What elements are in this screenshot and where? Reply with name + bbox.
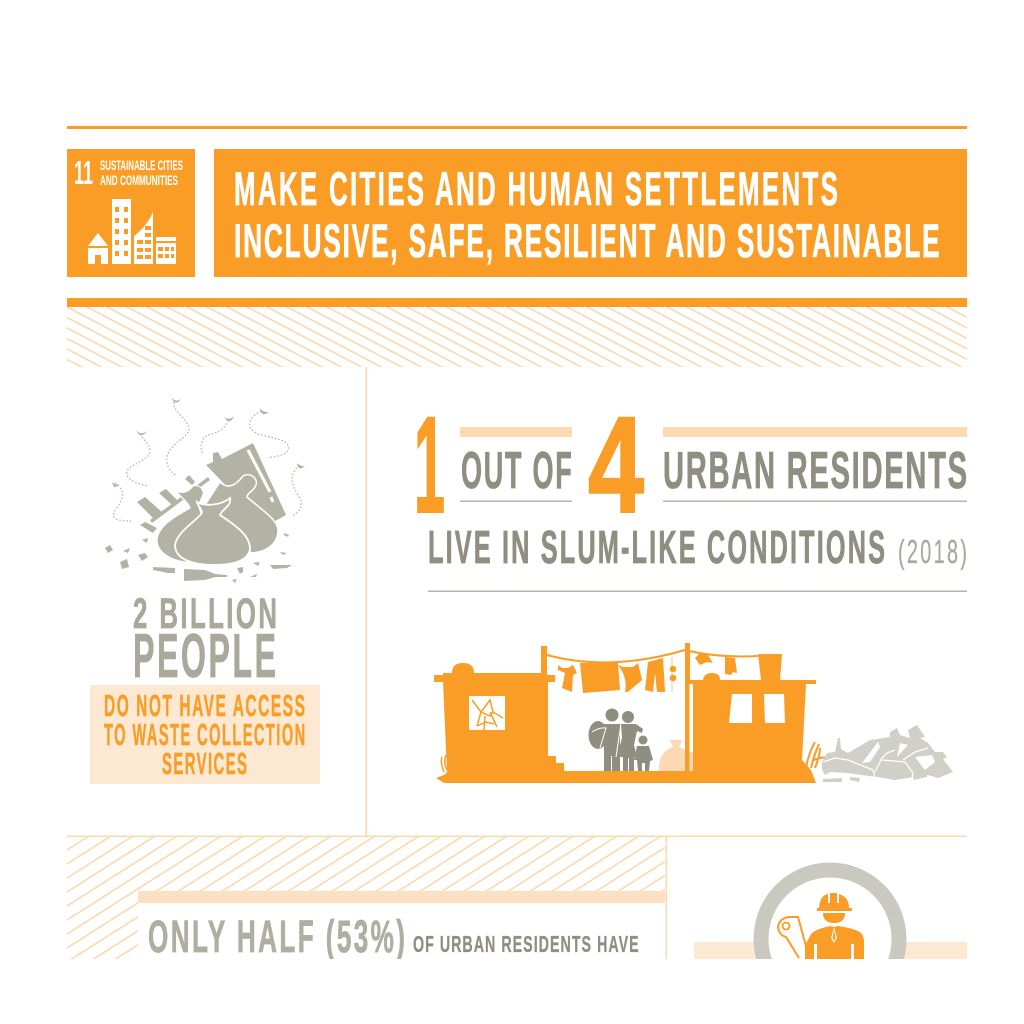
slum illustration bbox=[434, 643, 953, 783]
rubbish pile bbox=[822, 725, 953, 782]
title banner bbox=[214, 149, 967, 277]
stat: 2 billion people: PEOPLE bbox=[133, 622, 276, 691]
stat: 1 out of 4: 4 bbox=[588, 389, 644, 542]
flies and odour trails bbox=[114, 402, 301, 521]
callout: waste collection: DO NOT HAVE ACCESS bbox=[104, 689, 305, 724]
stat: 1 out of 4: 1 bbox=[414, 389, 445, 542]
gap beside the pole bbox=[690, 684, 693, 752]
bottom cut-off bbox=[0, 959, 1024, 1024]
washing line and clothes bbox=[547, 650, 758, 662]
stat: 1 out of 4: LIVE IN SLUM-LIKE CONDITIONS bbox=[428, 521, 885, 573]
broken window bbox=[469, 696, 505, 730]
access heading: OF URBAN RESIDENTS HAVE bbox=[413, 933, 639, 958]
goal name bbox=[100, 157, 183, 188]
callout: waste collection: SERVICES bbox=[162, 747, 247, 782]
windows bbox=[729, 694, 785, 723]
stat: 2 billion people: 2 BILLION bbox=[133, 589, 277, 638]
discarded fridge bbox=[206, 443, 286, 525]
top rule bbox=[67, 126, 967, 129]
grass bbox=[806, 742, 830, 768]
glass bottle bbox=[184, 569, 227, 581]
rubbish scraps bbox=[105, 533, 292, 583]
title banner: MAKE CITIES AND HUMAN SETTLEMENTS bbox=[234, 164, 838, 216]
callout: waste collection bbox=[90, 685, 320, 784]
lower hatched panel bbox=[67, 837, 665, 959]
access heading bbox=[138, 891, 665, 962]
houses and ground bbox=[434, 643, 816, 783]
stat: 1 out of 4: URBAN RESIDENTS bbox=[663, 441, 967, 499]
icon: engineer bbox=[778, 893, 864, 959]
hatched band bbox=[67, 307, 967, 367]
icon: city buildings bbox=[88, 199, 176, 264]
goal number: 11 bbox=[74, 154, 93, 191]
light bag bbox=[659, 740, 695, 771]
title banner: INCLUSIVE, SAFE, RESILIENT AND SUSTAINABLE bbox=[234, 216, 940, 268]
garbage bags bbox=[205, 475, 278, 553]
goal name: SUSTAINABLE CITIES bbox=[100, 157, 183, 173]
family bbox=[588, 708, 653, 771]
callout: waste collection: TO WASTE COLLECTION bbox=[104, 718, 305, 753]
stat: 2 billion people bbox=[133, 589, 277, 691]
waste icon bbox=[105, 397, 305, 583]
goal name: AND COMMUNITIES bbox=[100, 172, 178, 188]
stat: 1 out of 4: OUT OF bbox=[461, 440, 572, 499]
stat: 1 out of 4 bbox=[414, 389, 967, 592]
access heading: ONLY HALF (53%) bbox=[148, 912, 405, 962]
SDG 11 badge bbox=[67, 149, 195, 277]
stat: 1 out of 4: (2018) bbox=[898, 533, 967, 570]
orange band bbox=[67, 298, 967, 307]
broken fence bbox=[137, 475, 195, 533]
engineer badge bbox=[694, 870, 967, 1008]
